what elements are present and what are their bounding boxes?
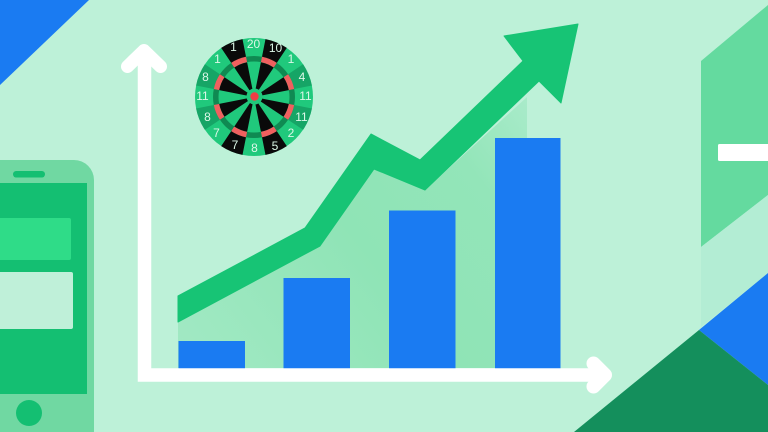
phone body: [0, 160, 94, 432]
y axis arrow: [128, 50, 160, 66]
dartboard numbers: 8: [204, 110, 211, 124]
axis lines: [144, 55, 604, 375]
dartboard numbers: 1: [288, 52, 295, 66]
bar 3: [389, 210, 456, 368]
outer ring dark segments: [196, 64, 312, 130]
arrow: green growth trend: [178, 24, 578, 322]
dartboard numbers: 7: [213, 126, 220, 140]
x axis arrow: [594, 364, 605, 386]
phone card: green: [0, 218, 71, 260]
bull centre: [250, 92, 259, 101]
double ring red: [214, 57, 294, 137]
inner wedge field: [218, 62, 290, 132]
panel: right light-green shape: [701, 5, 768, 247]
dartboard numbers: 1: [230, 40, 237, 54]
black wedges: [219, 62, 289, 132]
phone speaker: [13, 171, 45, 178]
bar 1: [178, 341, 245, 368]
bar chart: [178, 138, 560, 368]
dartboard numbers: 2: [288, 126, 295, 140]
dartboard numbers: 8: [251, 141, 258, 155]
bar 2: [284, 278, 350, 368]
board base: [195, 38, 313, 156]
bull outer: [246, 88, 262, 104]
double ring dark green: [213, 56, 295, 138]
dartboard numbers: [196, 37, 312, 155]
phone home button: [16, 400, 42, 426]
chart: area under trend line: [178, 97, 527, 368]
dartboard numbers: 10: [269, 41, 282, 55]
dartboard numbers: 5: [272, 139, 279, 153]
chart axes: [128, 50, 605, 386]
bar 4: [495, 138, 560, 368]
dartboard numbers: 20: [247, 37, 260, 51]
outer ring black segments: [221, 39, 287, 155]
dartboard numbers: 8: [202, 70, 209, 84]
dartboard numbers: 4: [299, 70, 306, 84]
corner triangle: top-left blue: [0, 0, 89, 85]
white bar: [718, 144, 768, 161]
panel: right pale shape: [701, 195, 768, 327]
icon: smartphone: [0, 160, 94, 432]
corner shape: blue diamond: [699, 273, 768, 385]
dartboard numbers: 1: [214, 52, 221, 66]
corner shape: dark green: [574, 330, 768, 432]
phone card: pale: [0, 272, 73, 329]
dartboard numbers: 11: [299, 89, 312, 103]
dartboard numbers: 11: [196, 89, 209, 103]
icon: dartboard: [195, 37, 313, 156]
phone screen: [0, 183, 87, 394]
dartboard numbers: 11: [295, 110, 308, 124]
dartboard numbers: 7: [232, 138, 239, 152]
